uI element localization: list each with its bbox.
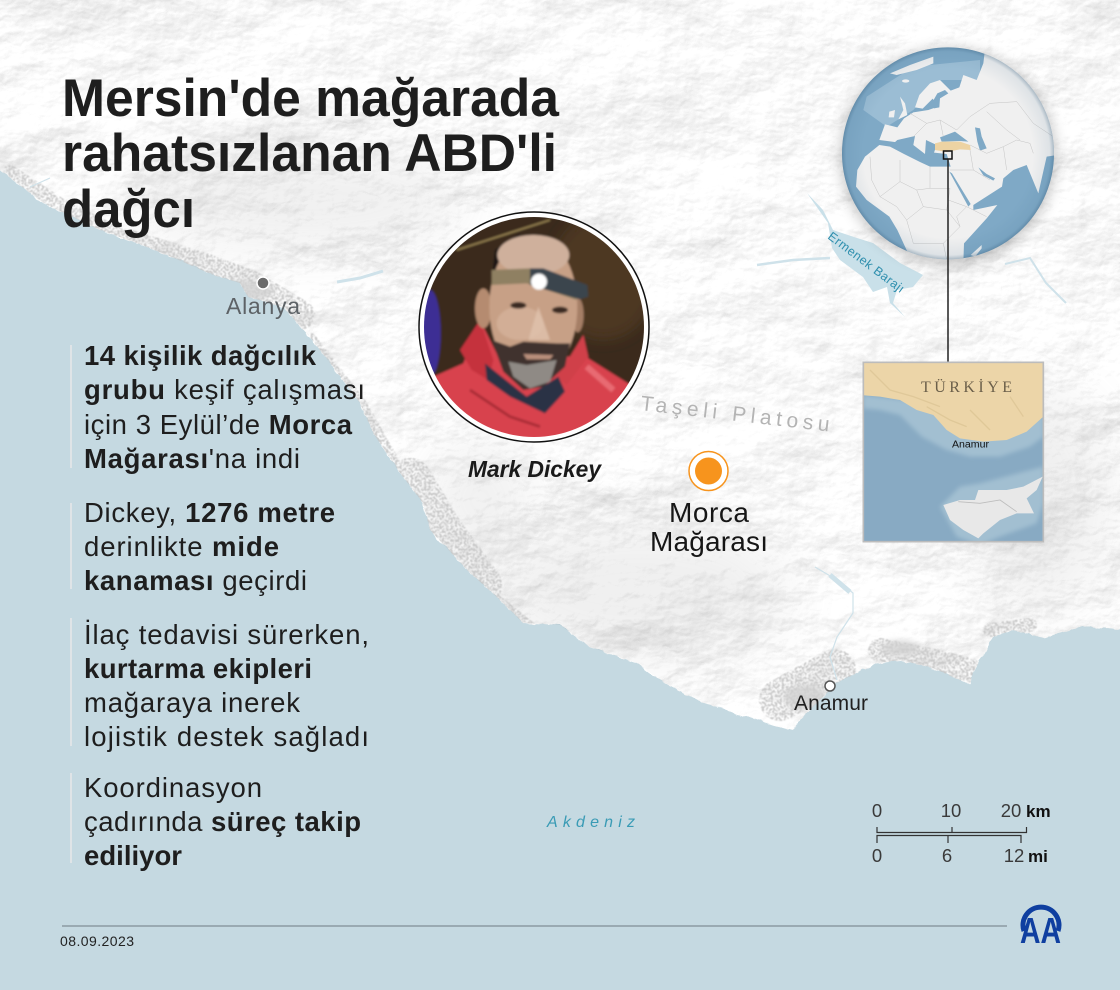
hair — [492, 234, 519, 270]
Türkiye highlighted — [935, 142, 971, 152]
label: Taşeli Platosu: Taşeli Platosu — [639, 392, 831, 436]
ears — [475, 288, 492, 328]
paragraph 3: İlaç tedavisi sürerken, — [84, 619, 369, 650]
band — [492, 268, 577, 300]
connector line — [947, 159, 949, 362]
Cyprus — [943, 477, 1043, 538]
nose — [528, 307, 550, 340]
paragraph 4: çadırında süreç takip — [84, 806, 361, 837]
inset label: Türkiye: TÜRKİYE — [921, 378, 1012, 396]
jacket — [434, 327, 630, 437]
label: Anamur: Anamur — [794, 692, 868, 715]
eyes — [510, 302, 568, 313]
shelf water — [863, 395, 1043, 457]
globe sphere — [842, 47, 1067, 263]
scale bar: 0 — [872, 845, 882, 866]
paragraph 1: grubu keşif çalışması — [84, 374, 365, 405]
paragraph 1: 14 kişilik dağcılık — [84, 340, 317, 371]
scale bar: 10 — [941, 800, 961, 821]
paragraph 4: ediliyor — [84, 840, 182, 871]
portrait ring — [419, 212, 649, 442]
locator square — [944, 151, 952, 159]
paragraph 3: mağaraya inerek — [84, 687, 300, 718]
globe locator — [840, 47, 1067, 362]
portrait photo — [424, 217, 644, 437]
date: 08.09.2023 — [60, 933, 134, 949]
label: Anamur — [794, 681, 868, 715]
beard — [492, 340, 570, 390]
paragraph 2: kanaması geçirdi — [84, 565, 307, 596]
Mediterranean Sea — [890, 136, 951, 167]
inset map — [860, 360, 1043, 545]
scale bar: mi — [1028, 847, 1048, 866]
land with terrain — [0, 0, 1120, 730]
Caspian Sea — [975, 127, 987, 151]
Black Sea — [940, 132, 968, 142]
scale bar: 12 — [1004, 845, 1024, 866]
urban coastal areas — [10, 172, 1030, 700]
shallow shelf water — [863, 60, 980, 127]
paragraph 2: Dickey, 1276 metre — [84, 497, 335, 528]
country borders — [870, 102, 1053, 260]
portrait: Mark Dickey — [418, 211, 650, 443]
paragraph 2: derinlikte mide — [84, 531, 279, 562]
marker: Morca Mağarası — [650, 452, 768, 557]
photo caption: Mark Dickey — [468, 456, 602, 482]
regional terrain tone — [130, 150, 1110, 660]
paragraph 4: Koordinasyon — [84, 772, 262, 803]
label: Alanya: Alanya — [226, 293, 300, 319]
marker: Morca Mağarası: Morca — [669, 497, 749, 528]
scale bar — [872, 800, 1051, 866]
urban core areas — [217, 280, 920, 710]
paragraph 4 — [70, 772, 361, 871]
paragraph 1 — [70, 340, 365, 474]
inset label: Anamur: Anamur — [952, 439, 990, 450]
paragraph 3 — [70, 618, 369, 752]
paragraph 1: Mağarası'na indi — [84, 443, 300, 474]
label: Alanya — [226, 277, 300, 319]
scarf — [485, 363, 565, 413]
sphere shading — [842, 47, 1054, 259]
title: dağcı — [62, 180, 195, 239]
Eurasia and Africa land — [856, 54, 1054, 260]
footer rule — [62, 926, 1007, 927]
title: Mersin'de mağarada — [62, 69, 559, 128]
paragraph 1: için 3 Eylül’de Morca — [84, 409, 353, 440]
scale bar: 6 — [942, 845, 952, 866]
paragraph 3: kurtarma ekipleri — [84, 653, 312, 684]
label: Akdeniz: Akdeniz — [546, 814, 635, 831]
Türkiye land — [860, 360, 1043, 442]
lamp — [530, 268, 588, 299]
logo: AA: AA — [1020, 910, 1061, 951]
label: Ermenek Barajı: Ermenek Barajı — [825, 229, 907, 296]
Greenland, Iceland, Britain, Madagascar — [889, 57, 982, 257]
title: rahatsızlanan ABD'li — [62, 124, 557, 183]
paragraph 3: lojistik destek sağladı — [84, 721, 369, 752]
Persian Gulf — [978, 167, 995, 181]
title — [62, 69, 559, 239]
scale bar: km — [1026, 802, 1051, 821]
paragraph 2 — [70, 497, 335, 596]
lake: Ermenek Barajı — [807, 193, 923, 317]
scale bar: 0 — [872, 800, 882, 821]
scale bar: 20 — [1001, 800, 1021, 821]
Red Sea — [949, 172, 971, 207]
rivers and small lakes — [30, 178, 1066, 680]
marker: Morca Mağarası: Mağarası — [650, 526, 768, 557]
globe shadow — [840, 48, 1056, 264]
head — [488, 261, 578, 349]
Baltic Sea — [933, 90, 948, 108]
